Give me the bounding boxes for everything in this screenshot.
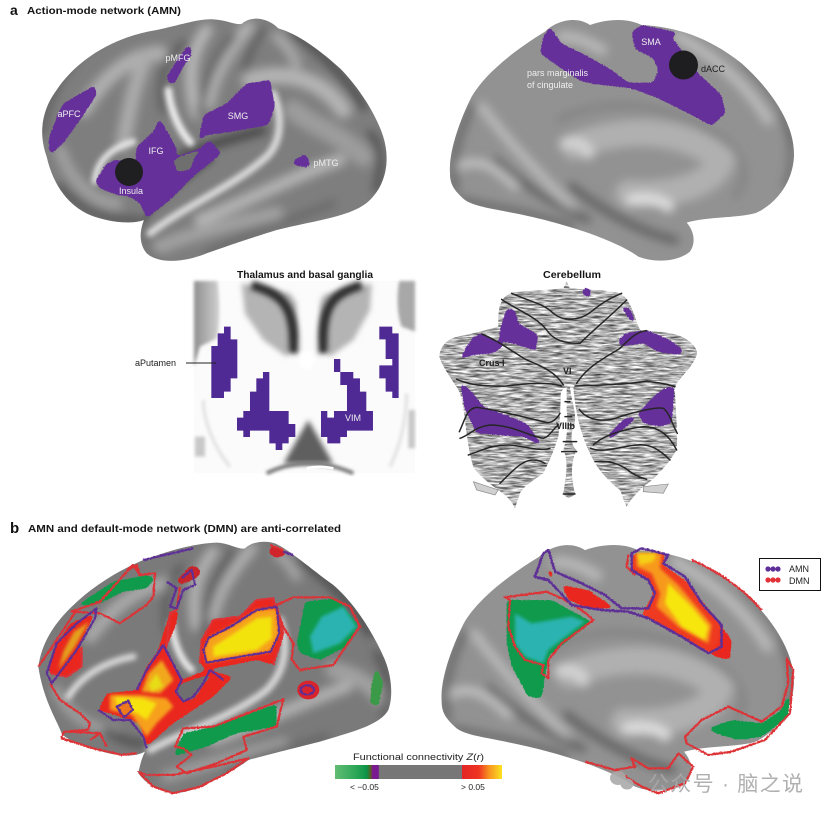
heading: cerebellum: Cerebellum (543, 269, 601, 281)
AMN purple outlines lateral (47, 548, 314, 748)
heading: thalamus: Thalamus and basal ganglia (237, 269, 373, 281)
panel: medial brain AMN (450, 20, 794, 261)
legend: AMN and DMN: AMN (789, 564, 809, 574)
purple zones on cerebellum (459, 287, 683, 447)
colour bar: functional connectivity: > 0.05 (461, 782, 485, 792)
green anti-correlated fields (75, 575, 383, 757)
black node: dACC (669, 50, 698, 80)
region labels lateral: SMG (228, 111, 248, 121)
teal core (310, 607, 357, 653)
connectivity colour fields medial (507, 553, 790, 740)
panel: thalamus and basal ganglia (135, 269, 415, 473)
teal precuneus core (515, 613, 585, 663)
label aPutamen with leader (135, 358, 216, 368)
green orbitofrontal (708, 690, 790, 740)
lobule labels: VI (563, 366, 572, 376)
heading: panel b (10, 520, 341, 537)
legend: AMN and DMN: DMN (789, 576, 810, 586)
AMN purple region medial (540, 25, 726, 126)
brain surface lateral (42, 19, 387, 261)
purple voxel clusters (211, 327, 399, 450)
region labels medial: of cingulate (527, 80, 573, 90)
icon: chat bubbles (610, 771, 634, 790)
red-orange-yellow hot fields (48, 545, 319, 747)
DMN red outlines medial (505, 555, 793, 793)
region labels medial: pars marginalis (527, 68, 589, 78)
black node: insula (115, 158, 143, 186)
lobule labels: VIIIb (556, 421, 576, 431)
gray insular gap (173, 148, 204, 172)
legend: AMN and DMN (760, 558, 820, 590)
region labels lateral: IFG (148, 146, 164, 156)
label aPutamen with leader: aPutamen (135, 358, 176, 368)
brain surface medial b (442, 545, 794, 790)
colour bar: functional connectivity: < −0.05 (350, 782, 379, 792)
anatomical slice (194, 281, 415, 473)
heading: panel a: a (10, 2, 18, 18)
region labels medial: SMA (641, 37, 661, 47)
panel: cerebellum (439, 269, 697, 508)
lobule labels: Crus I (479, 358, 505, 368)
panel: medial brain connectivity (442, 545, 794, 793)
region labels lateral: Insula (119, 186, 143, 196)
region labels lateral: pMTG (313, 158, 339, 168)
panel: lateral brain connectivity (38, 542, 391, 793)
region labels lateral: pMFG (165, 53, 191, 63)
panel: lateral brain AMN (42, 19, 387, 261)
colour bar: functional connectivity (335, 752, 502, 792)
lobule labels (479, 358, 576, 431)
heading: panel b: b (10, 520, 19, 537)
black lobule boundary lines (457, 293, 677, 494)
heading: panel a: Action-mode network (AMN) (27, 5, 181, 17)
colour bar: functional connectivity: Functional connectivity Z(r) (353, 752, 484, 762)
label VIM: VIM (345, 413, 361, 423)
region labels lateral: aPFC (57, 109, 81, 119)
brain surface medial (450, 20, 794, 261)
DMN red outlines lateral (38, 545, 360, 793)
brain surface lateral b (38, 542, 391, 793)
heading: panel a (10, 2, 181, 18)
gray insular gap b (175, 673, 213, 702)
red-yellow cingulate (546, 553, 732, 660)
AMN purple outline medial (535, 548, 722, 653)
region labels medial: dACC (701, 64, 726, 74)
green precuneus (507, 600, 592, 698)
region labels medial (527, 37, 726, 90)
connectivity colour fields lateral (48, 545, 383, 757)
cerebellar flatmap (439, 282, 697, 508)
region labels lateral (57, 53, 339, 196)
heading: panel b: AMN and default-mode network (DMN) are anti-correlated (28, 523, 341, 535)
AMN purple regions lateral (48, 43, 309, 218)
watermark: 公众号 · 脑之说 (648, 773, 803, 796)
